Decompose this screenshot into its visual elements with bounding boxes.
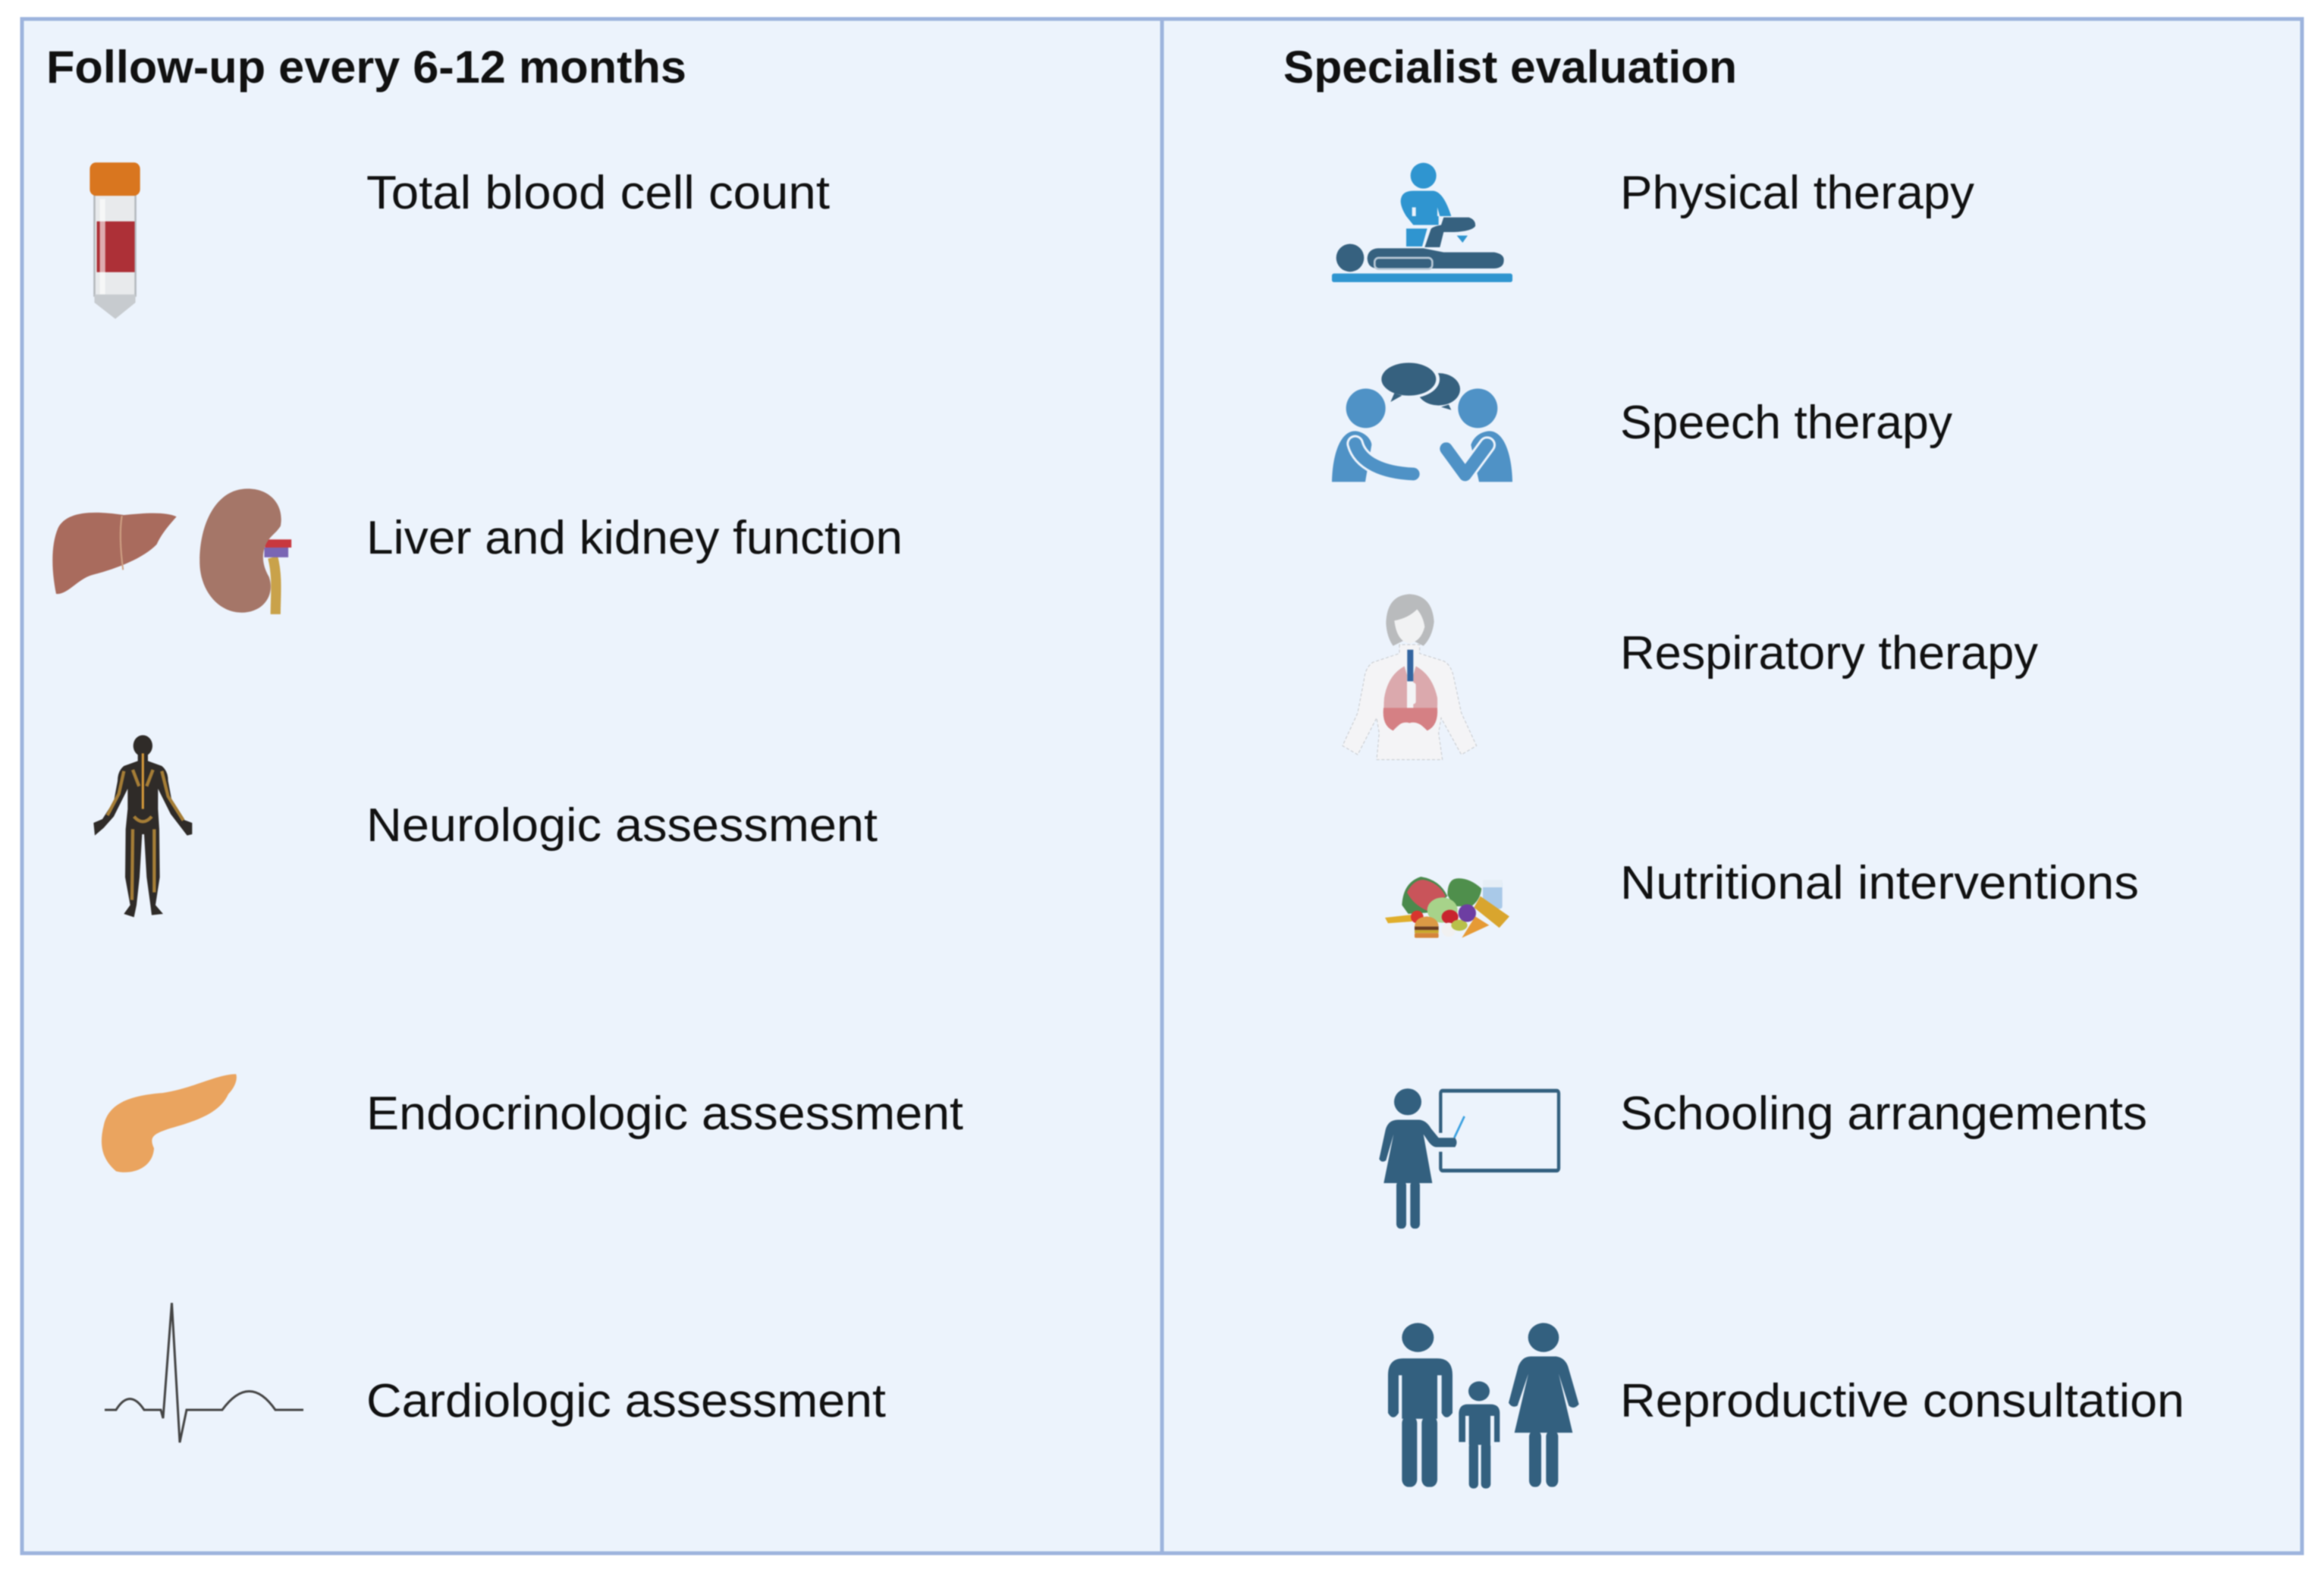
text: reproductive consultation: Reproductive consultation (1620, 1375, 2184, 1427)
icon: pancreas (102, 1074, 237, 1172)
icon: nutrition foods (1385, 877, 1509, 938)
icon: speech therapy (1332, 360, 1512, 482)
icon: nervous system figure (93, 735, 192, 917)
heading: specialist evaluation: Specialist evaluation (1283, 42, 1737, 93)
icon: ECG trace (105, 1303, 303, 1442)
text: schooling arrangements: Schooling arrangements (1620, 1088, 2147, 1140)
icon: liver (52, 513, 177, 594)
icon: family (1388, 1323, 1579, 1489)
icon: physical therapy (1332, 163, 1512, 282)
heading: follow-up: Follow-up every 6-12 months (46, 42, 686, 93)
text: respiratory therapy: Respiratory therapy (1620, 627, 2038, 680)
text: physical therapy: Physical therapy (1620, 167, 1974, 219)
panel: specialist evaluation (1162, 19, 2302, 1553)
panel: follow-up every 6-12 months (22, 19, 1162, 1553)
icon: kidney (199, 488, 291, 614)
text: liver and kidney function: Liver and kidney function (366, 512, 903, 564)
icon: teacher at board (1379, 1088, 1559, 1229)
text: neurologic assessment: Neurologic assessment (366, 799, 878, 852)
text: total blood cell count: Total blood cell count (366, 167, 830, 219)
text: cardiologic assessment: Cardiologic assessment (366, 1375, 886, 1427)
text: speech therapy: Speech therapy (1620, 397, 1952, 449)
icon: respiratory figure (1343, 594, 1477, 760)
text: nutritional interventions: Nutritional interventions (1620, 857, 2139, 909)
icon: blood tube (90, 162, 140, 319)
text: endocrinologic assessment: Endocrinologic assessment (366, 1088, 963, 1140)
